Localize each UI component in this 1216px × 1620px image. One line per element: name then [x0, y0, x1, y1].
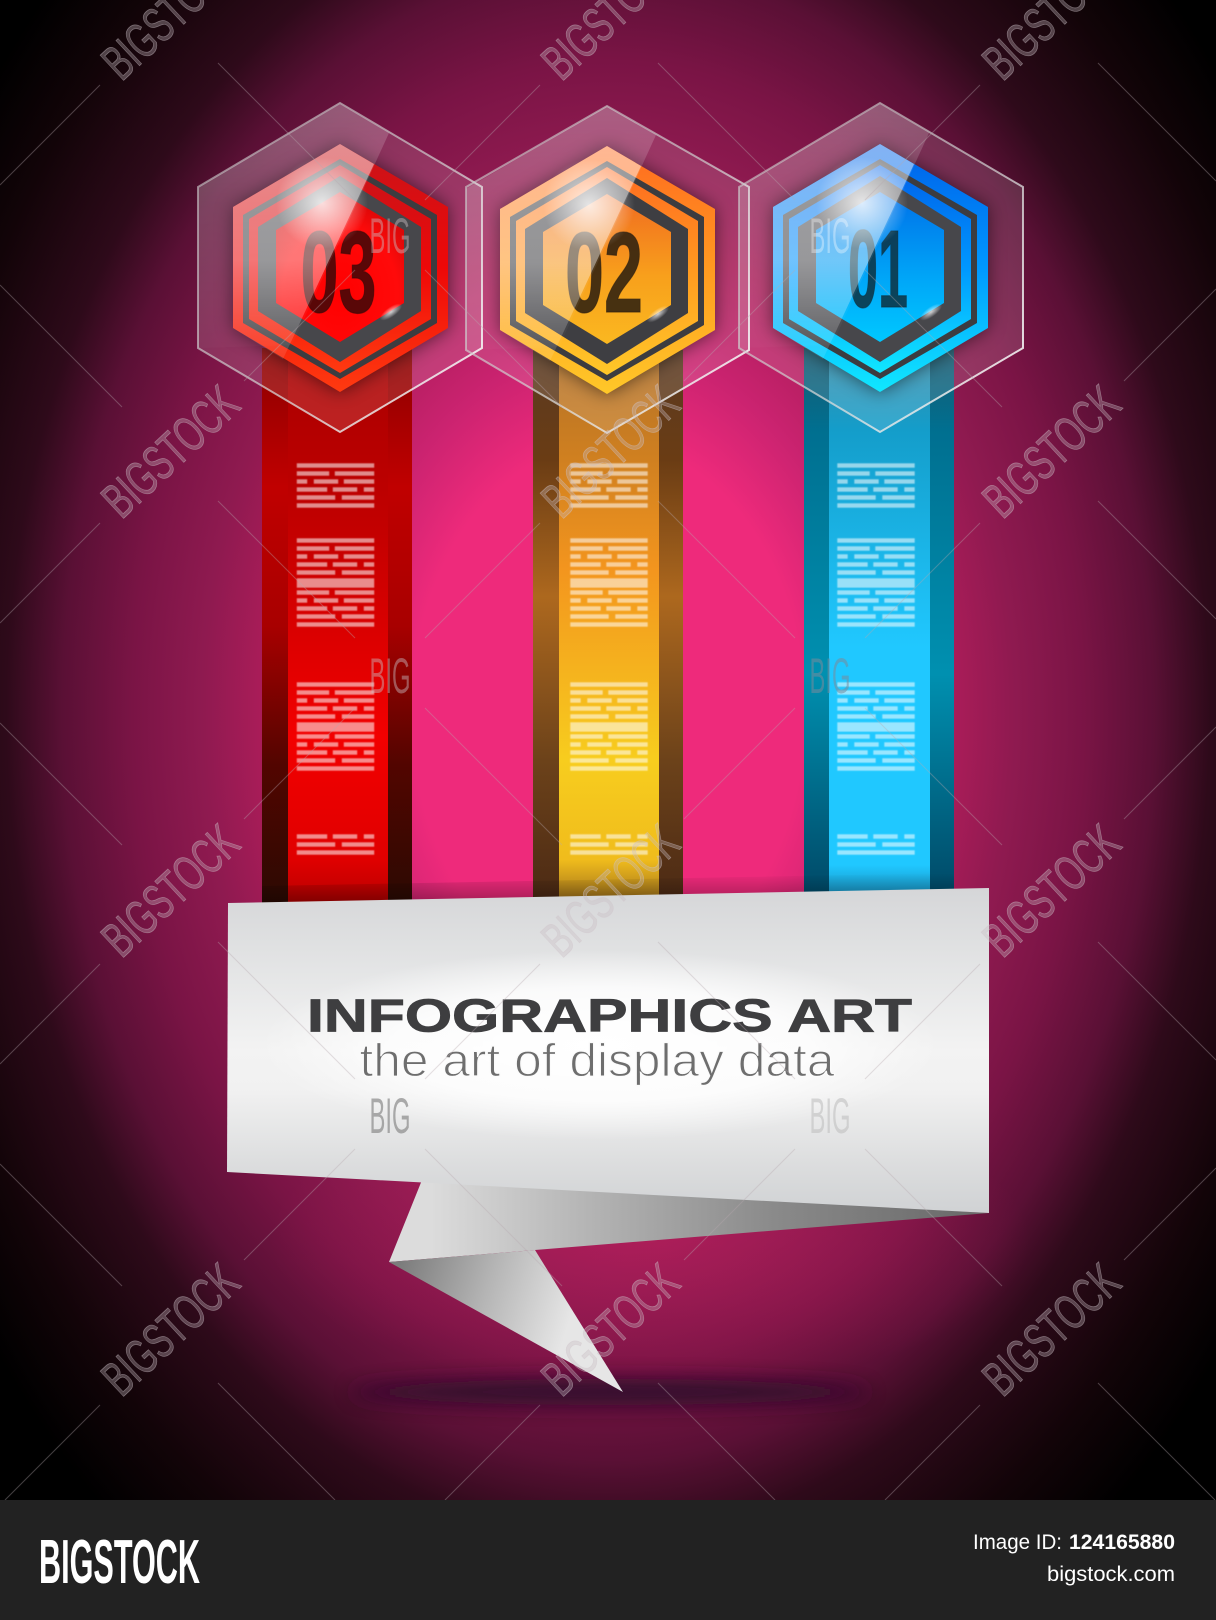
watermark: BIG repeated: BIG	[370, 648, 410, 704]
watermark: BIGSTOCK repeated: BIGSTOCK	[531, 375, 690, 528]
subtitle: the art of display data	[360, 1034, 835, 1086]
watermark: BIGSTOCK repeated: BIGSTOCK	[531, 814, 690, 967]
glass sheen	[199, 104, 389, 348]
watermark: BIGSTOCK repeated: BIGSTOCK	[531, 1253, 690, 1406]
watermark: BIGSTOCK repeated: BIGSTOCK	[972, 375, 1131, 528]
badge 03: red hexagon	[198, 103, 482, 432]
text placeholder bars: orange column	[570, 464, 648, 854]
text: BIG	[810, 1088, 850, 1144]
title: INFOGRAPHICS ART	[307, 990, 912, 1042]
badge 02: orange hexagon	[466, 106, 749, 433]
ribbon: red column	[262, 348, 412, 904]
floor shadow	[350, 1379, 870, 1405]
image id number: 124165880	[1069, 1531, 1175, 1554]
watermark: BIGSTOCK repeated: BIGSTOCK	[972, 814, 1131, 967]
watermark: BIG repeated: BIG	[370, 1088, 410, 1144]
watermark: BIGSTOCK repeated: BIGSTOCK	[91, 814, 250, 967]
watermark: BIGSTOCK repeated	[91, 0, 1131, 1406]
watermark: BIGSTOCK repeated: BIGSTOCK	[972, 1253, 1131, 1406]
text placeholder bars: blue column	[838, 464, 914, 854]
number 02: 02	[565, 210, 643, 337]
origami banner panel	[227, 888, 989, 1392]
watermark: BIG repeated: BIG	[370, 208, 410, 264]
lower background glow	[270, 1090, 1030, 1390]
glass sheen	[466, 106, 656, 350]
glass sheen	[739, 104, 929, 348]
badge 01: blue hexagon: 01	[848, 208, 908, 331]
website: bigstock.com	[1047, 1563, 1175, 1586]
ribbon: orange column	[533, 350, 683, 898]
shadow above panel	[262, 873, 954, 904]
watermark: BIGSTOCK repeated: BIGSTOCK	[91, 375, 250, 528]
text: BIG	[810, 208, 850, 264]
banner face	[227, 888, 989, 1213]
badge 01: blue hexagon	[739, 103, 1023, 432]
image id label: Image ID:	[973, 1531, 1062, 1554]
watermark: BIG repeated	[370, 208, 850, 1144]
number 03: 03	[300, 207, 376, 337]
watermark: BIGSTOCK repeated: BIGSTOCK	[91, 1253, 250, 1406]
banner tip	[389, 1250, 623, 1392]
text placeholder bars: red column	[297, 464, 374, 854]
footer bar: BIGSTOCK	[39, 1528, 200, 1597]
footer bar	[0, 1500, 1216, 1620]
banner fold	[389, 1180, 989, 1262]
ribbon: blue column	[804, 348, 954, 892]
text: BIG	[810, 648, 850, 704]
